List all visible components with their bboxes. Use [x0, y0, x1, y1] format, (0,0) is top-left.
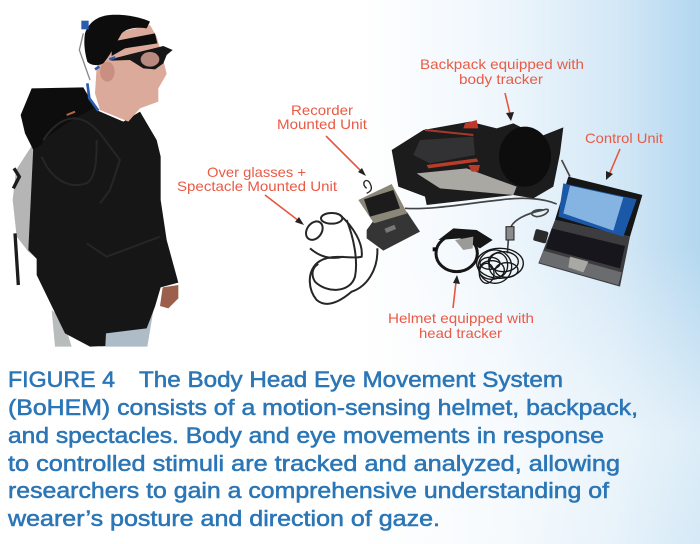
blue cables and wire	[79, 21, 115, 111]
label: recorder	[277, 102, 367, 132]
label: spectacles: Spectacle Mounted Unit	[177, 178, 337, 194]
photo: man wearing the BoHEM system	[13, 15, 178, 347]
arrow: backpack	[505, 93, 514, 121]
head band	[112, 33, 157, 56]
head and neck	[95, 25, 167, 122]
figure caption: researchers to gain a comprehensive understanding of	[8, 478, 610, 503]
arrow: spectacles	[265, 195, 304, 225]
figure caption	[7, 367, 638, 531]
goggles	[110, 46, 173, 69]
helmet	[433, 228, 493, 272]
photo: spectacles, cable and recorder	[303, 181, 420, 304]
label: control unit: Control Unit	[585, 130, 663, 146]
label: spectacles: Over glasses +	[207, 164, 306, 180]
label: helmet: head tracker	[419, 325, 502, 341]
ear	[100, 62, 115, 82]
figure caption: The Body Head Eye Movement System	[139, 367, 563, 392]
photo: backpack, helmet, laptop	[392, 120, 642, 287]
label: backpack: body tracker	[459, 71, 543, 87]
figure caption: and spectacles. Body and eye movements in response	[8, 423, 604, 448]
laptop	[533, 177, 642, 287]
label: spectacles	[177, 164, 337, 194]
arrow: recorder	[326, 136, 366, 176]
hand	[160, 285, 178, 308]
connecting cables	[405, 160, 570, 253]
trousers	[52, 307, 154, 347]
arrow: helmet	[453, 275, 460, 308]
label: backpack	[420, 56, 584, 87]
figure caption: FIGURE 4	[8, 367, 115, 392]
label: backpack: Backpack equipped with	[420, 56, 584, 72]
figure caption: wearer’s posture and direction of gaze.	[7, 506, 440, 531]
figure caption: to controlled stimuli are tracked and analyzed, allowing	[8, 451, 620, 476]
label: recorder: Recorder	[291, 102, 353, 118]
coiled cable	[477, 248, 523, 283]
backpack straps and cable	[42, 112, 160, 257]
arrow: control unit	[606, 149, 620, 180]
label: helmet	[388, 310, 534, 341]
spectacle unit cables	[303, 181, 377, 304]
small inline box	[506, 227, 514, 240]
label: helmet: Helmet equipped with	[388, 310, 534, 326]
recorder unit	[358, 184, 420, 251]
hair	[84, 15, 150, 65]
figure caption: (BoHEM) consists of a motion-sensing helmet, backpack,	[8, 395, 638, 420]
backpack on the wearer	[13, 87, 97, 285]
black sweater	[37, 108, 178, 347]
backpack	[392, 120, 563, 205]
label: recorder: Mounted Unit	[277, 116, 367, 132]
